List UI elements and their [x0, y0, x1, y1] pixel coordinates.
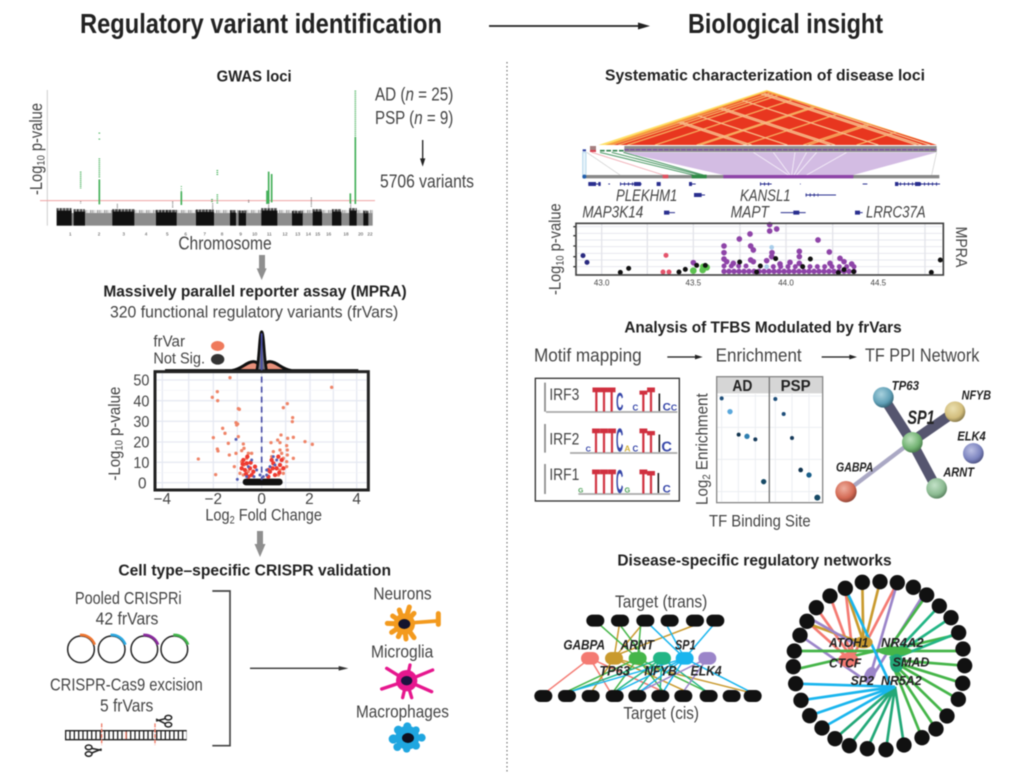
variant count: 5706 variants [380, 170, 474, 191]
locus y label: -Log [546, 261, 565, 295]
pooled CRISPRi label: 42 frVars [96, 608, 158, 628]
step labels: Motif mapping [534, 345, 642, 366]
bipartite target network: Target (cis) [623, 703, 699, 723]
circular regulatory network: CTCF [829, 656, 862, 671]
enrichment dot plot [717, 377, 823, 503]
step labels: TF PPI Network [865, 345, 980, 366]
gene labels: MAPT [731, 202, 770, 221]
panel: disease loci characterization [548, 68, 968, 295]
MPRA subtitle: 320 functional regulatory variants (frVars) [110, 302, 398, 321]
Manhattan plot: 10 [252, 231, 258, 236]
motif logos [535, 378, 679, 501]
volcano plot [155, 372, 368, 490]
motif logos: I [657, 468, 660, 500]
Manhattan plot: 20 [358, 231, 364, 236]
motif logos: C [586, 444, 592, 453]
panel: regulatory networks [534, 553, 972, 757]
step labels: Enrichment [716, 345, 802, 366]
motif logos: T [600, 464, 608, 501]
gene labels [582, 186, 926, 221]
motif logos: T [592, 423, 600, 460]
motif logos: T [608, 382, 616, 419]
motif logos: T [600, 423, 608, 460]
motif logos: T [639, 423, 648, 460]
pooled CRISPRi label: Pooled CRISPRi [75, 588, 182, 608]
volcano x label: Log [205, 506, 234, 525]
Manhattan plot: 18 [343, 231, 349, 236]
lower track [582, 175, 939, 179]
PPI network [835, 379, 991, 502]
motif logos: C [671, 402, 678, 412]
Manhattan plot: 5 [166, 231, 169, 236]
motif logos: C [632, 444, 638, 453]
volcano axis ticks: 50 [133, 373, 149, 390]
motif logos: IRF3 [549, 385, 579, 404]
motif logos: T [647, 382, 655, 419]
gene labels: LRRC37A [866, 202, 926, 221]
cell labels: Macrophages [356, 702, 449, 722]
arrow: GWAS to MPRA [257, 255, 267, 280]
Manhattan plot: 2 [98, 231, 101, 236]
panel: MPRA [103, 284, 407, 526]
circular regulatory network: ATOH1 [828, 635, 868, 650]
y axis label: 10 [36, 155, 48, 166]
volcano axis ticks: 20 [133, 435, 149, 452]
PPI network: SP1 [907, 408, 935, 429]
locus y label: 10 [554, 255, 566, 266]
cell labels [356, 583, 449, 722]
volcano axis ticks: 10 [133, 455, 149, 472]
CRISPR-Cas9 label: 5 frVars [100, 696, 153, 716]
motif logos: T [608, 464, 616, 501]
motif logos: T [647, 425, 655, 459]
y axis label: p-value [26, 103, 46, 155]
DNA with cuts [65, 723, 187, 745]
enrichment dot plot: PSP [781, 378, 811, 395]
PPI network: ARNT [942, 466, 975, 480]
MPRA locus scatter: 44.0 [778, 279, 794, 288]
PPI network: GABPA [836, 461, 873, 475]
panel: GWAS loci [26, 69, 474, 280]
cell labels: Neurons [373, 583, 432, 603]
enrichment y label: Log [692, 477, 711, 505]
Manhattan plot: 7 [203, 231, 206, 236]
motif logos: C [616, 423, 623, 460]
Manhattan plot: 8 [221, 231, 224, 236]
step labels [534, 345, 980, 366]
PPI network: ELK4 [957, 430, 986, 444]
volcano axis ticks: 0 [257, 491, 266, 508]
volcano x label: 2 [230, 514, 235, 526]
volcano axis ticks: 30 [133, 414, 149, 431]
volcano x label: Fold Change [235, 506, 322, 525]
Manhattan plot: 1 [69, 231, 72, 236]
volcano axis ticks: 0 [138, 475, 147, 492]
circular regulatory network: NR4A2 [881, 635, 924, 650]
volcano axis ticks [133, 373, 361, 508]
motif logos: T [592, 382, 601, 419]
motif logos: A [624, 443, 631, 453]
motif logos: T [600, 382, 608, 419]
motif logos: G [578, 487, 583, 494]
Manhattan plot [40, 90, 375, 236]
volcano axis ticks: 40 [133, 393, 149, 410]
loci title: Systematic characterization of disease loci [605, 68, 925, 85]
panel: CRISPR validation [50, 563, 449, 756]
heading: Biological insight: Biological insight [688, 8, 883, 39]
bipartite target network: GABPA [563, 637, 605, 652]
y axis label: -Log [26, 160, 46, 195]
motif logos: G [624, 485, 630, 494]
circular regulatory network: NR5A2 [881, 673, 922, 688]
volcano axis ticks: 4 [352, 491, 361, 508]
motif logos: IRF2 [549, 429, 579, 448]
bipartite target network: SP1 [675, 637, 696, 652]
motif logos: I [658, 431, 661, 459]
CRISPR-Cas9 label: CRISPR-Cas9 excision [50, 675, 203, 695]
volcano axis ticks: −4 [154, 491, 172, 508]
legend [153, 334, 224, 367]
enrichment y label: 2 [701, 474, 713, 480]
bracket [212, 591, 230, 746]
motif logos: T [592, 464, 600, 501]
plasmid icons [68, 635, 188, 663]
Manhattan plot: 14 [306, 231, 311, 236]
motif logos: C [632, 403, 638, 412]
motif logos: C [616, 465, 623, 501]
x axis label: Chromosome [178, 232, 272, 253]
Manhattan plot: 4 [145, 231, 148, 236]
MPRA locus scatter: 44.5 [871, 279, 887, 288]
motif logos: I [658, 390, 661, 418]
heading: Regulatory variant identification: Regulatory variant identification [80, 8, 442, 39]
bipartite target network: TP63 [599, 664, 630, 679]
MPRA title: Massively parallel reporter assay (MPRA) [103, 284, 407, 301]
loci counts [375, 84, 453, 128]
top variant track [583, 146, 937, 152]
step arrows [667, 355, 857, 359]
gene tracks [588, 184, 940, 213]
enrichment x label: TF Binding Site [709, 512, 811, 531]
Manhattan plot: 12 [282, 231, 288, 236]
arrow: MPRA to CRISPR [254, 531, 266, 557]
CRISPR title: Cell type–specific CRISPR validation [118, 563, 391, 580]
cell labels: Microglia [371, 641, 433, 661]
networks title: Disease-specific regulatory networks [617, 553, 892, 570]
arrow: CRISPR to cells [250, 666, 348, 671]
volcano axis ticks: 2 [305, 491, 314, 508]
Manhattan plot: 9 [239, 231, 242, 236]
enrichment dot plot: AD [732, 378, 752, 395]
PPI network: TP63 [892, 379, 919, 393]
Manhattan plot: 11 [267, 231, 272, 236]
CRISPR-Cas9 label [50, 675, 203, 716]
Manhattan plot: 3 [122, 231, 125, 236]
gene labels: KANSL1 [740, 186, 791, 205]
GWAS title: GWAS loci [217, 69, 292, 86]
LD heat map [598, 89, 937, 146]
MPRA track label: MPRA [952, 227, 969, 268]
linking fan [583, 152, 937, 175]
legend: frVar [153, 334, 185, 351]
MPRA locus scatter [573, 223, 943, 288]
scissors icons [85, 715, 172, 756]
icon: neuron [387, 607, 438, 639]
volcano y label: p-value [105, 387, 124, 440]
bipartite target network: ELK4 [691, 664, 722, 679]
motif logos: C [616, 389, 623, 417]
volcano axis ticks: −2 [205, 491, 222, 508]
panel: TFBS analysis [534, 320, 991, 531]
MPRA locus scatter: 43.5 [686, 279, 702, 288]
loci counts: PSP (n = 9) [375, 107, 453, 128]
circular regulatory network [786, 574, 972, 757]
gene labels: PLEKHM1 [616, 186, 677, 205]
Manhattan plot: 15 [315, 231, 321, 236]
circular regulatory network: SMAD [893, 654, 930, 669]
Manhattan plot: 13 [295, 231, 301, 236]
marginal density [165, 332, 358, 371]
enrichment y label: Enrichment [692, 393, 711, 474]
volcano y label: 10 [114, 440, 126, 451]
arrow: loci to variants [420, 140, 425, 167]
motif logos: T [639, 385, 648, 417]
circular regulatory network: SP2 [851, 673, 875, 688]
Manhattan plot: 6 [184, 231, 187, 236]
icon: microglia [382, 665, 433, 698]
icon: macrophage [389, 722, 426, 753]
loci counts: AD (n = 25) [375, 84, 453, 105]
PPI network: NFYB [962, 388, 991, 402]
motif logos: T [639, 464, 648, 501]
Manhattan plot: 16 [326, 231, 332, 236]
bipartite target network: NFYB [644, 664, 677, 679]
legend: Not Sig. [153, 350, 205, 367]
motif logos: C [661, 439, 672, 455]
motif logos: IRF1 [549, 465, 579, 484]
bipartite target network [534, 591, 762, 723]
pooled CRISPRi label [75, 588, 182, 628]
bipartite target network: ARNT [620, 637, 655, 652]
volcano y label: -Log [105, 447, 124, 481]
gene labels: MAP3K14 [582, 202, 643, 221]
bipartite target network: Target (trans) [615, 591, 707, 611]
MPRA locus scatter: 43.0 [594, 279, 610, 288]
motif logos: C [663, 483, 671, 495]
motif logos: T [647, 465, 655, 501]
TFBS title: Analysis of TFBS Modulated by frVars [624, 320, 902, 337]
Manhattan plot: 22 [367, 231, 373, 236]
arrow: identification to insight [489, 22, 650, 30]
locus y label: p-value [546, 203, 565, 255]
motif logos: T [608, 423, 616, 460]
motif logos: C [663, 401, 671, 413]
